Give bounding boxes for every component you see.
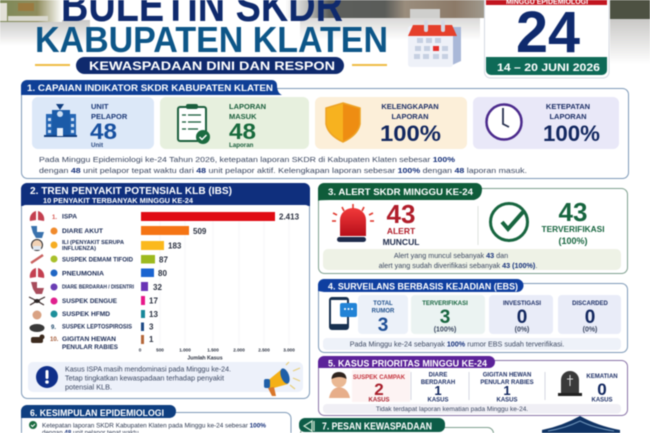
row: ISPA: 1.	[52, 215, 57, 221]
card: discarded: DISCARDED	[572, 301, 608, 307]
chart axis: 0	[139, 348, 142, 352]
gigitan hewan	[480, 372, 534, 404]
card: unit pelapor: 48	[90, 119, 117, 144]
terverifikasi stat: TERVERIFIKASI	[542, 225, 604, 234]
card: kelengkapan laporan	[315, 97, 467, 149]
diare berdarah: DIARE	[429, 372, 447, 378]
section 1 heading: 1. CAPAIAN INDIKATOR SKDR KABUPATEN KLATEN	[27, 83, 273, 94]
alert note: alert yang sudah diverifikasi sebanyak 43 (100%).	[379, 261, 537, 270]
row: diare berdarah: 32	[153, 283, 162, 292]
card: total rumor	[358, 295, 408, 336]
card: ketepatan laporan: KETEPATAN	[546, 102, 590, 111]
title	[35, 0, 388, 60]
row: ILI: INFLUENZA)	[62, 246, 96, 252]
card: terverifikasi	[411, 295, 485, 334]
suspek campak: 2	[374, 380, 384, 399]
chart axis: 2.000	[233, 348, 245, 352]
panel 7: pesan kewaspadaan	[299, 418, 494, 433]
gigitan hewan: 1	[503, 383, 511, 398]
row: suspek HFMD: SUSPEK HFMD	[62, 311, 111, 318]
section 7 heading	[299, 418, 445, 432]
conclusion item: Ketepatan laporan SKDR Kabupaten Klaten pada Minggu ke-24 sebesar 100%	[42, 422, 267, 430]
icon: hospital	[44, 104, 77, 137]
chart axis: 2.500	[258, 348, 270, 352]
card: laporan masuk: MASUK	[229, 112, 257, 121]
card: investigasi: (0%)	[515, 326, 529, 334]
title: KABUPATEN KLATEN	[35, 19, 388, 60]
section 1 heading	[21, 80, 282, 96]
panel 1: capaian indikator	[21, 80, 628, 178]
row: suspek leptospirosis: 3	[149, 322, 154, 332]
diare berdarah: 1	[434, 383, 442, 398]
row: ILI	[32, 240, 182, 252]
card: terverifikasi: TERVERIFIKASI	[422, 301, 468, 307]
subtitle pill: KEWASPADAAN DINI DAN RESPON	[89, 61, 335, 73]
callout: ISPA: Tetap tingkatkan kewaspadaan terhadap penyakit	[65, 374, 224, 382]
section 3 heading	[318, 183, 482, 201]
alert muncul stat	[383, 199, 419, 247]
kematian: KEMATIAN	[586, 374, 618, 380]
callout: ISPA: potensial KLB.	[65, 382, 112, 392]
section 7 heading: 7. PESAN KEWASPADAAN	[322, 422, 432, 432]
diare berdarah: BERDARAH	[421, 380, 455, 386]
card: kelengkapan laporan: KELENGKAPAN	[381, 102, 439, 111]
card: ketepatan laporan	[473, 97, 619, 149]
panel 3: alert SKDR	[318, 183, 628, 274]
date card: 24	[516, 0, 580, 65]
icon: clock	[486, 104, 522, 140]
gigitan hewan: PENULAR RABIES	[480, 380, 534, 386]
section 6 heading: 6. KESIMPULAN EPIDEMIOLOGI	[30, 408, 164, 419]
icon: verified check	[490, 204, 528, 240]
row: diare akut: 509	[193, 227, 207, 236]
chart axis: 1.000	[179, 348, 191, 352]
row: demam tifoid	[31, 255, 168, 264]
alert note	[323, 249, 621, 270]
row: ILI: 183	[168, 242, 182, 250]
row: gigitan hewan penular rabies: GIGITAN HEWAN	[62, 336, 117, 343]
row: ISPA	[30, 211, 300, 222]
icon: calendar	[408, 20, 461, 67]
icon: gravestone	[558, 371, 582, 396]
gigitan hewan: GIGITAN HEWAN	[483, 372, 531, 378]
bar chart	[29, 211, 300, 362]
panel 2: tren penyakit	[21, 183, 310, 398]
icon: siren	[332, 204, 374, 242]
card: ketepatan laporan: LAPORAN	[549, 112, 587, 121]
card: laporan masuk: Laporan	[229, 142, 254, 149]
row: suspek leptospirosis: 9.	[51, 325, 56, 331]
card: unit pelapor: PELAPOR	[91, 112, 128, 121]
section 4 heading: 4. SURVEILANS BERBASIS KEJADIAN (EBS)	[328, 282, 518, 292]
suspek campak: SUSPEK CAMPAK	[353, 375, 406, 381]
card: total rumor: TOTAL	[373, 301, 393, 307]
capaian summary text: dengan 48 unit pelapor tepat waktu dari 48 unit pelapor aktif. Kelengkapan laporan sebesar 100% dengan 48 laporan masuk.	[39, 166, 527, 175]
icon: shield	[326, 103, 360, 142]
icon: child with measles	[329, 372, 350, 398]
row: demam tifoid: 87	[159, 256, 168, 264]
row: diare berdarah: DIARE BERDARAH / DISENTRI	[62, 284, 135, 290]
section 5 heading: 5. KASUS PRIORITAS MINGGU KE-24	[328, 358, 488, 370]
kematian: KASUS	[591, 398, 613, 404]
date card	[484, 0, 609, 78]
panel 6: kesimpulan epidemiologi	[21, 405, 291, 433]
panel 5: kasus prioritas	[318, 356, 628, 416]
row: gigitan hewan penular rabies: PENULAR RABIES	[62, 344, 118, 351]
row: suspek dengue	[29, 296, 158, 306]
card: discarded: (0%)	[583, 326, 597, 334]
capaian summary text: Pada Minggu Epidemiologi ke-24 Tahun 2026, ketepatan laporan SKDR di Kabupaten Klaten sebesar 100%	[39, 155, 456, 164]
icon: navy shield	[542, 416, 620, 433]
card: total rumor: RUMOR	[372, 308, 395, 314]
date card: 14 – 20 JUNI 2026	[497, 62, 600, 74]
chart axis: 1.500	[207, 348, 219, 352]
row: suspek leptospirosis	[30, 322, 154, 332]
EBS note: Pada Minggu ke-24 sebanyak 100% rumor EBS sudah terverifikasi.	[350, 340, 564, 348]
diare berdarah	[421, 372, 455, 404]
card: terverifikasi: (100%)	[434, 326, 456, 334]
icon: megaphone	[264, 362, 300, 396]
card: laporan masuk: LAPORAN	[229, 102, 266, 111]
conclusion item	[29, 421, 267, 433]
chart axis: 500	[156, 348, 164, 352]
row: diare akut	[31, 226, 207, 238]
suspek campak: KASUS	[368, 398, 390, 404]
subtitle pill	[35, 57, 387, 74]
alert muncul stat: MUNCUL	[383, 237, 419, 247]
section 2 heading	[21, 183, 310, 210]
capaian summary text	[39, 155, 527, 175]
card: investigasi: 0	[517, 307, 527, 328]
row: pneumonia: PNEUMONIA	[62, 270, 105, 278]
card: unit pelapor	[32, 97, 154, 149]
chart axis	[139, 348, 295, 362]
card: unit pelapor: Unit	[91, 142, 103, 149]
row: diare akut: DIARE AKUT	[62, 228, 103, 235]
kematian	[586, 374, 618, 404]
row: suspek dengue: 17	[149, 296, 158, 306]
kasus note: Tidak terdapat laporan kematian pada Minggu ke-24.	[376, 406, 528, 413]
card: investigasi	[489, 295, 553, 334]
terverifikasi stat	[542, 197, 604, 246]
row: demam tifoid: SUSPEK DEMAM TIFOID	[62, 256, 134, 264]
row: suspek dengue: SUSPEK DENGUE	[62, 298, 117, 305]
row: pneumonia	[30, 268, 167, 278]
section 2 heading: 10 PENYAKIT TERBANYAK MINGGU KE-24	[43, 198, 193, 205]
card: laporan masuk	[160, 97, 309, 149]
chart axis: 3.000	[283, 348, 295, 352]
card: investigasi: INVESTIGASI	[503, 301, 541, 307]
gigitan hewan: KASUS	[496, 398, 518, 404]
row: ISPA: ISPA	[62, 214, 78, 220]
alert muncul stat: ALERT	[387, 226, 416, 236]
callout: ISPA: Kasus ISPA masih mendominasi pada Minggu ke-24.	[65, 364, 231, 374]
row: suspek HFMD	[32, 310, 158, 320]
panel 4: surveilans EBS	[318, 279, 628, 352]
card: kelengkapan laporan: LAPORAN	[391, 112, 429, 121]
card: discarded	[558, 295, 621, 334]
row: suspek leptospirosis: SUSPEK LEPTOSPIROSIS	[62, 324, 132, 330]
row: ILI: ILI (PENYAKIT SERUPA	[62, 240, 124, 246]
terverifikasi stat: (100%)	[558, 236, 588, 246]
alert note: Alert yang muncul sebanyak 43 dan	[394, 251, 508, 260]
row: ISPA: 2.413	[279, 212, 300, 222]
row: diare berdarah	[31, 282, 162, 294]
section 2 heading: 2. TREN PENYAKIT POTENSIAL KLB (IBS)	[30, 186, 232, 197]
callout: ISPA	[28, 362, 303, 392]
kematian: 0	[597, 380, 607, 399]
card: discarded: 0	[585, 307, 595, 328]
diare berdarah: KASUS	[427, 398, 449, 404]
section 3 heading: 3. ALERT SKDR MINGGU KE-24	[328, 187, 474, 198]
EBS note	[323, 338, 621, 350]
row: suspek HFMD: 13	[149, 310, 158, 319]
chart axis: Jumlah Kasus	[187, 356, 223, 362]
card: unit pelapor: UNIT	[91, 102, 109, 111]
icon: clipboard	[178, 104, 210, 144]
icon: phone	[329, 297, 357, 330]
row: gigitan hewan penular rabies: 10.	[50, 337, 59, 343]
card: kelengkapan laporan: 100%	[380, 121, 441, 146]
row: gigitan hewan penular rabies: 1	[149, 335, 154, 344]
suspek campak	[352, 370, 410, 404]
card: terverifikasi: 3	[440, 307, 450, 328]
card: laporan masuk: 48	[229, 119, 256, 144]
row: gigitan hewan penular rabies	[31, 334, 154, 351]
kasus note	[323, 404, 621, 414]
card: total rumor: 3	[378, 315, 388, 336]
card: ketepatan laporan: 100%	[543, 121, 600, 146]
terverifikasi stat: 43	[559, 197, 587, 227]
row: pneumonia: 80	[158, 269, 167, 278]
alert muncul stat: 43	[387, 199, 415, 229]
